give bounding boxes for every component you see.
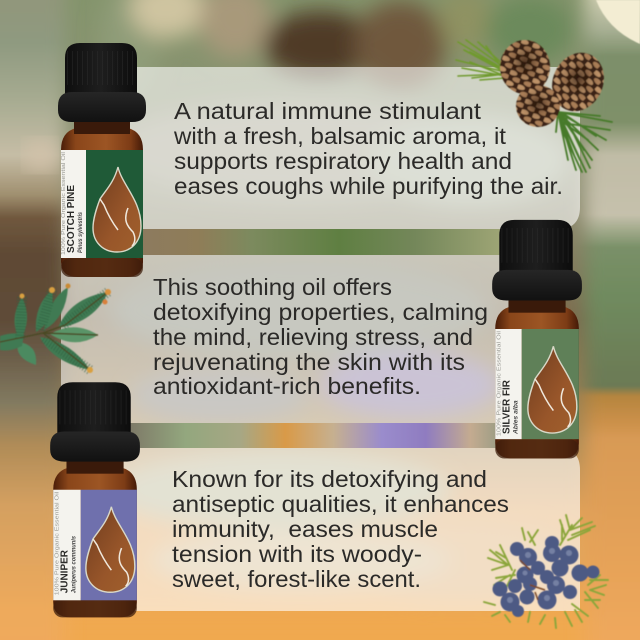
text: scotch pine description: A natural immune stimulant xyxy=(174,98,482,124)
text: juniper description xyxy=(172,466,509,592)
icon: fir sprig xyxy=(0,284,111,373)
text: scotch pine description: supports respiratory health and xyxy=(174,148,512,174)
text: scotch pine description: with a fresh, balsamic aroma, it xyxy=(173,123,506,149)
bottle: juniper: 100% Pure Organic Essential Oil xyxy=(54,492,60,595)
panel: scotch pine card xyxy=(130,67,580,229)
text: juniper description: tension with its woody- xyxy=(172,541,422,567)
bottle: silver fir xyxy=(492,220,582,459)
icon: pine cones with needles xyxy=(456,40,613,172)
bottle: juniper: Juniperus communis xyxy=(72,535,78,593)
bottle: silver fir: 100% Pure Organic Essential Oil xyxy=(496,331,502,436)
text: silver fir description: rejuvenating the skin with its xyxy=(153,349,465,375)
text: silver fir description: the mind, relieving stress, and xyxy=(153,324,473,350)
text: juniper description: Known for its detoxifying and xyxy=(172,466,487,492)
bottle: juniper xyxy=(50,382,140,617)
bottle: juniper: JUNIPER xyxy=(59,549,71,593)
text: silver fir description: detoxifying properties, calming xyxy=(153,299,488,325)
panel: silver fir card xyxy=(61,255,521,423)
text: juniper description: sweet, forest-like scent. xyxy=(172,566,421,592)
icon: juniper berries xyxy=(484,515,608,628)
text: silver fir description: antioxidant-rich benefits. xyxy=(153,373,421,399)
bottle: silver fir: SILVER FIR xyxy=(501,379,512,434)
text: silver fir description: This soothing oil offers xyxy=(153,274,392,300)
bottle: scotch pine xyxy=(58,43,146,277)
panel: juniper card xyxy=(110,448,580,611)
text: juniper description: immunity, eases muscle xyxy=(172,516,438,542)
text: scotch pine description: eases coughs while purifying the air. xyxy=(174,173,563,199)
bottle: scotch pine: 100% Pure Organic Essential Oil xyxy=(61,152,67,255)
text: juniper description: antiseptic qualities, it enhances xyxy=(172,491,509,517)
text: scotch pine description xyxy=(173,98,563,199)
text: silver fir description xyxy=(153,274,488,399)
bottle: silver fir: Abies alba xyxy=(513,400,520,435)
bottle: scotch pine: SCOTCH PINE xyxy=(66,185,77,253)
bottle: scotch pine: Pinus sylvestris xyxy=(78,211,84,253)
